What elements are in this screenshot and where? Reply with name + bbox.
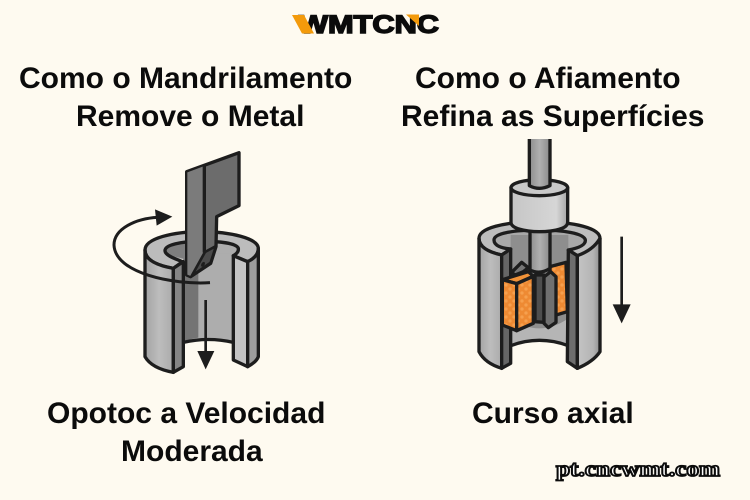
heading: boring: Remove o Metal: [76, 100, 304, 133]
heading: honing: Como o Afiamento: [415, 62, 681, 95]
right wall: [567, 238, 600, 368]
left wall: [479, 238, 511, 368]
caption: boring: Moderada: [121, 435, 263, 468]
top ring: [145, 232, 258, 268]
front abrasive stone: [502, 272, 533, 331]
central shaft: [530, 230, 550, 272]
right wall: [233, 248, 258, 367]
left wall: [145, 250, 183, 372]
diagram: boring tool in cylinder: [114, 153, 258, 372]
rotation arrow: [114, 209, 210, 283]
interior of bore: [493, 229, 585, 346]
heading: boring: [19, 62, 352, 133]
heading: boring: Como o Mandrilamento: [19, 62, 352, 95]
bore shadow at top: [165, 242, 190, 260]
honing head core: [535, 272, 556, 328]
heading: honing: Refina as Superfícies: [401, 100, 704, 133]
feed arrow: [197, 300, 214, 369]
logo: WMTCNC: WMTCNC: [299, 11, 439, 39]
interior wall of bore: [165, 241, 238, 342]
upper shaft: [529, 139, 550, 188]
collar: [511, 180, 568, 232]
feed arrow: [613, 237, 631, 323]
cutting insert: [192, 246, 216, 276]
top ring: [479, 222, 600, 256]
back stones: [512, 262, 567, 315]
caption: boring: [47, 397, 325, 468]
caption: honing: Curso axial: [472, 397, 634, 430]
diagram: honing tool in cylinder: [479, 139, 631, 368]
caption: boring: Opotoc a Velocidad: [47, 397, 325, 430]
watermark: pt.cncwmt.com: [556, 456, 720, 481]
boring bar: [187, 153, 239, 277]
heading: honing: [401, 62, 704, 133]
